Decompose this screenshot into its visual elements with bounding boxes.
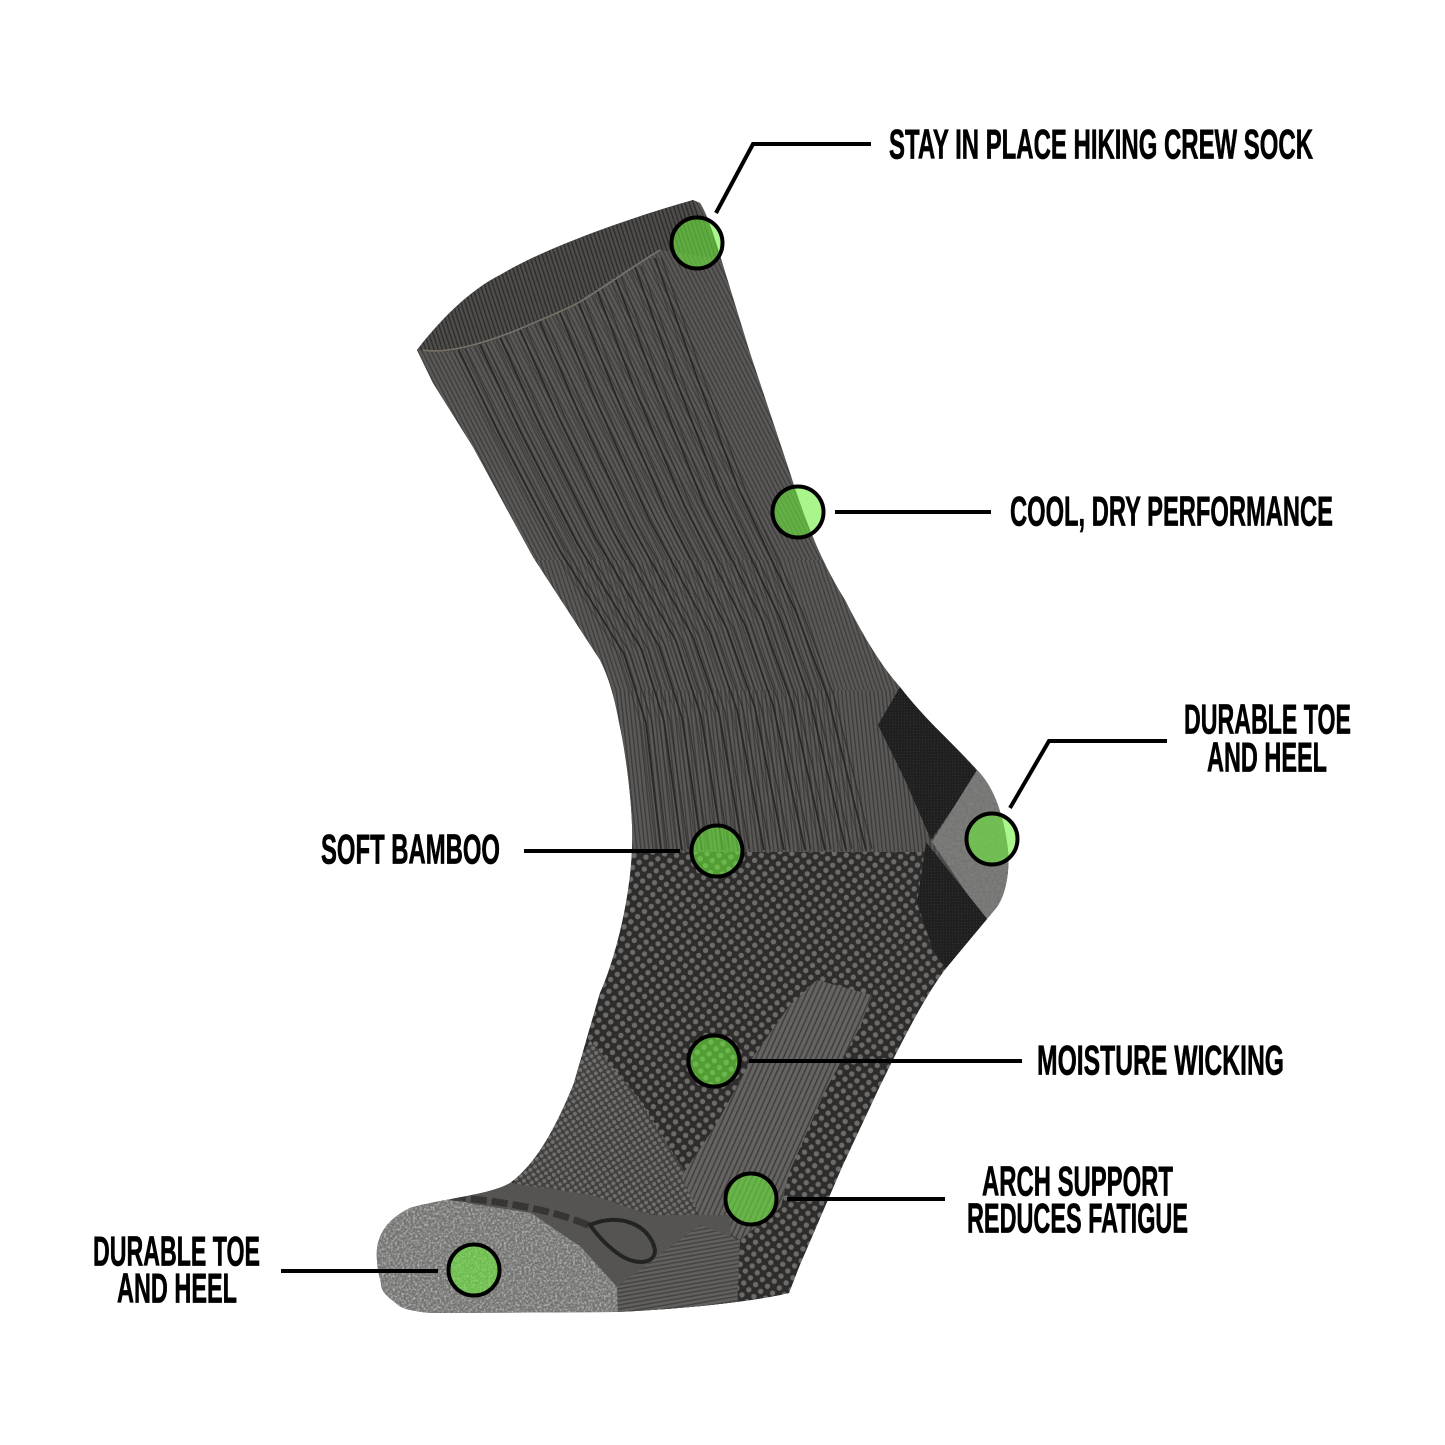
label: DURABLE TOE — [93, 1228, 260, 1274]
leader line — [835, 510, 991, 514]
green marker — [448, 1244, 500, 1296]
label — [1184, 696, 1351, 780]
label: SOFT BAMBOO — [321, 826, 500, 872]
callout: stay in place hiking crew sock — [672, 120, 1313, 268]
label — [967, 1158, 1188, 1242]
leader line — [281, 1269, 438, 1273]
sock leg ribbing — [417, 200, 1008, 855]
sock cuff rim — [423, 250, 660, 351]
green marker — [726, 1174, 776, 1224]
label: AND HEEL — [1207, 734, 1327, 780]
sock illustration — [370, 190, 1030, 1320]
heel black upper patch — [878, 687, 978, 840]
fine mesh forefoot — [510, 1040, 700, 1215]
callout: cool, dry performance — [772, 486, 1333, 538]
leader line — [749, 1059, 1022, 1063]
callout: arch support reduces fatigue — [726, 1158, 1188, 1242]
toe cap — [376, 1198, 618, 1313]
toe side lobe — [590, 1220, 655, 1262]
forefoot band — [430, 1183, 735, 1312]
leader line — [787, 1197, 945, 1201]
leader line — [716, 144, 871, 213]
label: ARCH SUPPORT — [982, 1158, 1173, 1204]
green marker — [772, 486, 824, 538]
callout: durable toe and heel (heel) — [966, 696, 1351, 864]
label: REDUCES FATIGUE — [967, 1194, 1188, 1242]
label: AND HEEL — [117, 1264, 237, 1312]
callout: moisture wicking — [688, 1036, 1284, 1086]
midfoot band — [617, 1225, 740, 1315]
heel grey panel — [932, 770, 1008, 918]
foot mesh panel — [380, 852, 960, 1310]
fabric speckle — [424, 208, 982, 1298]
sock base colour — [370, 190, 1030, 1320]
green marker — [692, 826, 742, 876]
heel black lower patch — [917, 842, 988, 970]
sock inner opening — [417, 200, 725, 352]
label — [93, 1228, 260, 1312]
leader line — [1010, 741, 1167, 808]
callout: soft bamboo — [321, 826, 742, 876]
toe logo band — [450, 1197, 590, 1226]
arch rib panel — [681, 980, 872, 1240]
green marker — [966, 814, 1018, 864]
green marker — [688, 1036, 740, 1086]
leader line — [524, 849, 680, 853]
callout: durable toe and heel (toe) — [93, 1228, 500, 1312]
label: MOISTURE WICKING — [1037, 1036, 1284, 1084]
green marker — [672, 218, 722, 268]
